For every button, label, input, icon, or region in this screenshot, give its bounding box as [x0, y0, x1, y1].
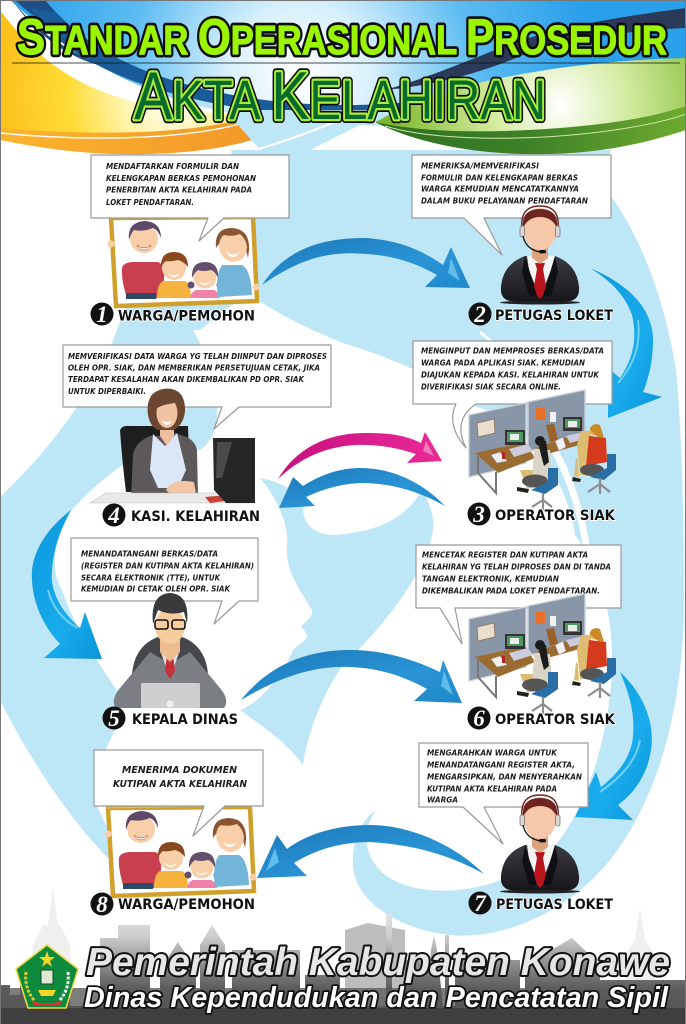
label 4	[102, 503, 260, 528]
speech bubble 7	[419, 743, 588, 844]
label 3	[468, 502, 616, 527]
label 5: 5	[108, 706, 120, 731]
speech bubble 1: KELENGKAPAN BERKAS PEMOHONAN	[106, 174, 256, 183]
speech bubble 5: KEMUDIAN DI CETAK OLEH OPR. SIAK	[81, 584, 231, 594]
footer title: Pemerintah Kabupaten Konawe: Pemerintah Kabupaten Konawe	[86, 941, 670, 984]
arrow: 6 to 7	[575, 672, 652, 820]
arrow: 4 to 5	[32, 510, 102, 659]
step 4: kasi kelahiran	[63, 345, 331, 528]
label 5	[102, 706, 238, 731]
title: Standar Operasional Prosedur: STANDAR OPERASIONAL PROSEDUR	[17, 9, 667, 65]
speech bubble 6: DIKEMBALIKAN PADA LOKET PENDAFTARAN.	[422, 586, 600, 596]
speech bubble 4: TERDAPAT KESALAHAN AKAN DIKEMBALIKAN PD OPR. SIAK	[68, 375, 305, 384]
label 4: KASI. KELAHIRAN	[131, 509, 260, 525]
step 8: warga/pemohon	[90, 750, 263, 917]
subtitle: Akta Kelahiran: AKTA KELAHIRAN	[134, 58, 546, 134]
speech bubble 3: WARGA PADA APLIKASI SIAK. KEMUDIAN	[421, 358, 585, 368]
label 1: 1	[96, 302, 108, 327]
speech bubble 6: TANGAN ELEKTRONIK, KEMUDIAN	[422, 574, 559, 584]
step 2: petugas loket	[412, 155, 613, 327]
speech bubble 5: (REGISTER DAN KUTIPAN AKTA KELAHIRAN)	[81, 562, 254, 570]
speech bubble 6	[416, 545, 621, 644]
speech bubble 7: MENANDATANGANI REGISTER AKTA,	[427, 760, 575, 770]
label 8	[90, 892, 255, 917]
icon: family frame	[108, 215, 260, 306]
step 6: operator siak	[416, 545, 621, 731]
icon: office workstation	[469, 594, 616, 714]
label 6: OPERATOR SIAK	[495, 712, 616, 728]
label 3: OPERATOR SIAK	[495, 508, 616, 524]
arrow: 7 to 8	[257, 825, 484, 878]
speech bubble 2: FORMULIR DAN KELENGKAPAN BERKAS	[421, 174, 578, 182]
label 8: 8	[96, 892, 108, 917]
emblem: Kabupaten Konawe	[16, 945, 78, 1008]
speech bubble 4	[63, 345, 331, 429]
step 3: operator siak	[413, 341, 616, 527]
speech bubble 3: DIAJUKAN KEPADA KASI. KELAHIRAN UNTUK	[421, 370, 600, 380]
skyline	[0, 887, 686, 1024]
background: white streaks	[480, 332, 586, 545]
speech bubble 2: DALAM BUKU PELAYANAN PENDAFTARAN	[421, 196, 588, 206]
speech bubble 8	[94, 750, 263, 836]
arrow: 3 to 4	[279, 468, 445, 508]
label 2: 2	[473, 302, 486, 327]
speech bubble 4: MEMVERIFIKASI DATA WARGA YG TELAH DIINPUT DAN DIPROSES	[68, 352, 327, 361]
label 7: PETUGAS LOKET	[496, 897, 613, 913]
label 2	[468, 302, 613, 327]
icon: call agent	[500, 795, 580, 894]
speech bubble 6: MENCETAK REGISTER DAN KUTIPAN AKTA	[422, 550, 588, 560]
icon: woman at desk	[90, 389, 255, 503]
arrow: 2 to 3	[590, 268, 662, 418]
speech bubble 5	[71, 538, 258, 624]
subtitle: Akta Kelahiran: AKTA KELAHIRAN	[134, 58, 546, 134]
label 6: 6	[473, 706, 485, 731]
speech bubble 1: PENERBITAN AKTA KELAHIRAN PADA	[106, 186, 252, 194]
subtitle: Akta Kelahiran: AKTA KELAHIRAN	[134, 58, 546, 134]
label 7	[468, 891, 613, 916]
speech bubble 8: MENERIMA DOKUMEN	[122, 765, 237, 776]
speech bubble 3: MENGINPUT DAN MEMPROSES BERKAS/DATA	[421, 346, 604, 356]
speech bubble 5: SECARA ELEKTRONIK (TTE), UNTUK	[81, 574, 221, 582]
icon: office workstation	[469, 390, 616, 510]
icon: family frame	[104, 805, 256, 896]
header banner	[0, 0, 686, 155]
speech bubble 6: KELAHIRAN YG TELAH DIPROSES DAN DI TANDA	[422, 562, 611, 572]
speech bubble 1: LOKET PENDAFTARAN.	[106, 198, 194, 207]
label 1: WARGA/PEMOHON	[118, 308, 255, 324]
step 7: petugas loket	[419, 743, 613, 916]
speech bubble 4: OLEH OPR. SIAK, DAN MEMBERIKAN PERSETUJUAN CETAK, JIKA	[68, 364, 320, 372]
speech bubble 7: WARGA	[427, 796, 458, 804]
icon: head of department with laptop	[114, 593, 226, 708]
label 3: 3	[472, 502, 485, 527]
label 8: WARGA/PEMOHON	[118, 897, 255, 913]
speech bubble 8: KUTIPAN AKTA KELAHIRAN	[113, 779, 247, 790]
speech bubble 3: DIVERIFIKASI SIAK SECARA ONLINE.	[421, 382, 561, 392]
speech bubble 7: MENGARSIPKAN, DAN MENYERAHKAN	[427, 772, 582, 782]
speech bubble 1: MENDAFTARKAN FORMULIR DAN	[106, 162, 239, 171]
label 4: 4	[107, 503, 120, 528]
footer subtitle: Dinas Kependudukan dan Pencatatan Sipil: Dinas Kependudukan dan Pencatatan Sipil	[84, 982, 669, 1014]
label 5: KEPALA DINAS	[132, 712, 238, 728]
title: Standar Operasional Prosedur: STANDAR OPERASIONAL PROSEDUR	[17, 9, 667, 65]
speech bubble 7: KUTIPAN AKTA KELAHIRAN PADA	[427, 784, 557, 794]
speech bubble 7: MENGARAHKAN WARGA UNTUK	[427, 748, 558, 758]
speech bubble 2: MEMERIKSA/MEMVERIFIKASI	[421, 162, 539, 170]
arrow: 5 to 6	[241, 650, 462, 703]
label 7: 7	[474, 891, 487, 916]
label 1	[90, 302, 255, 327]
speech bubble 2	[412, 155, 611, 255]
speech bubble 2: WARGA KEMUDIAN MENCATATKANNYA	[421, 184, 579, 194]
label 6	[468, 706, 616, 731]
arrow: 1 to 2	[262, 238, 470, 288]
step 5: kepala dinas	[71, 538, 258, 731]
speech bubble 1	[91, 155, 289, 241]
label 2: PETUGAS LOKET	[495, 308, 613, 324]
icon: call agent	[500, 206, 580, 304]
arrow: 4 to 3 pink	[278, 432, 442, 479]
speech bubble 3	[413, 341, 612, 448]
speech bubble 5: MENANDATANGANI BERKAS/DATA	[81, 550, 218, 558]
step 1: warga/pemohon	[90, 155, 289, 327]
speech bubble 4: UNTUK DIPERBAIKI.	[68, 387, 146, 396]
